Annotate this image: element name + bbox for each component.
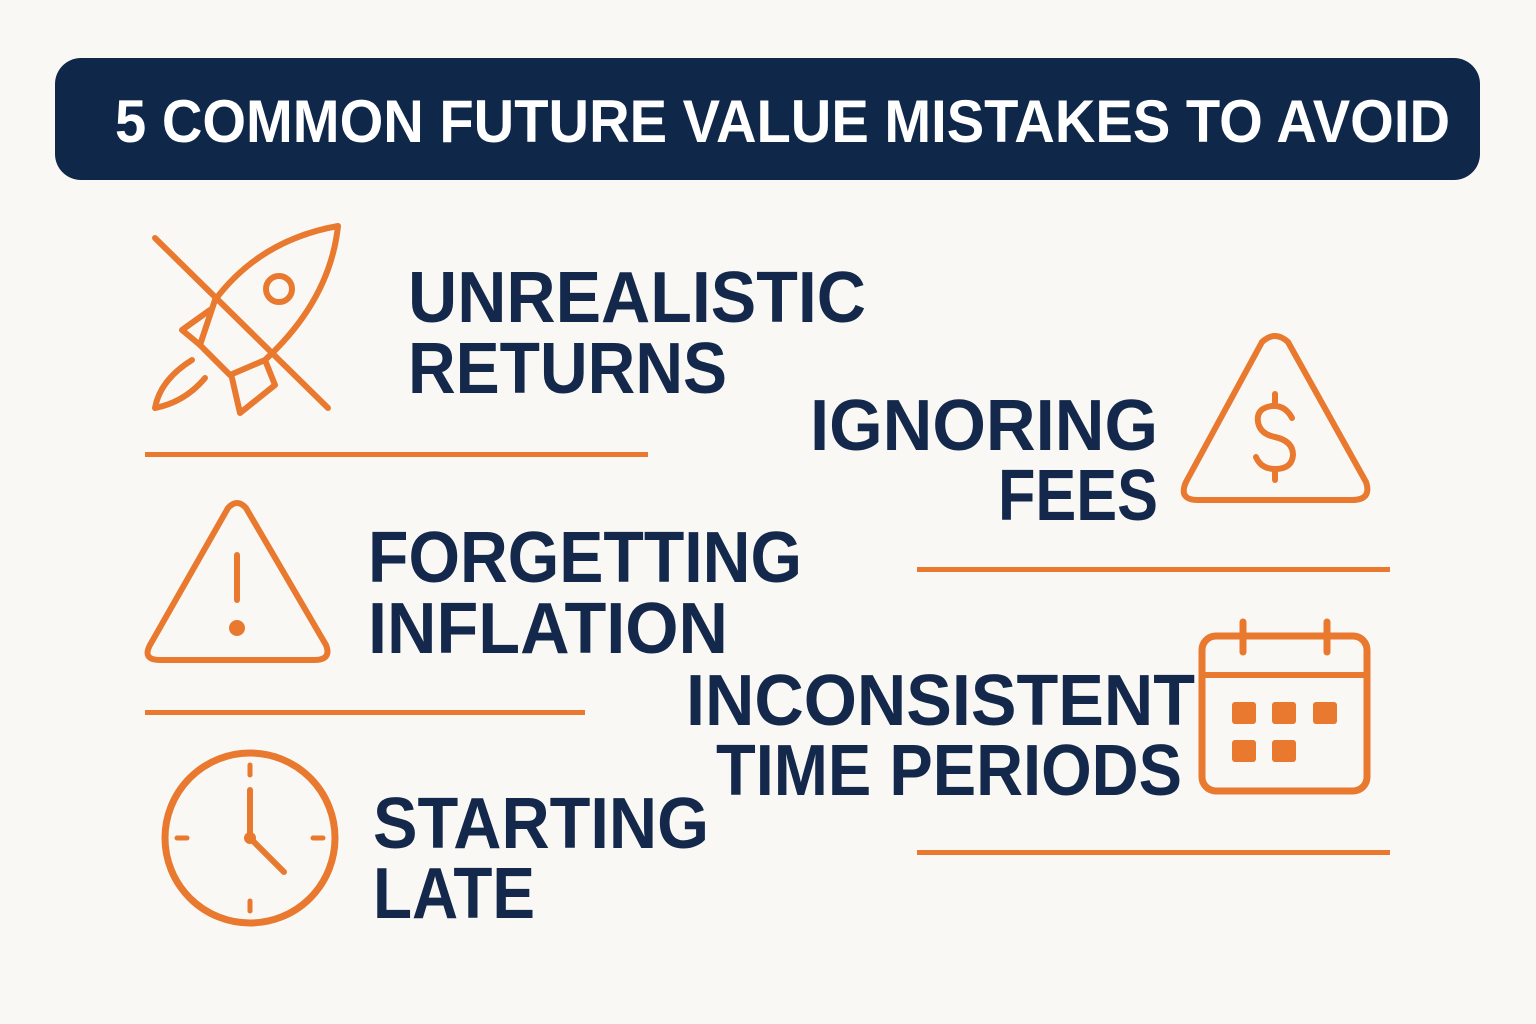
divider: under unrealistic returns — [145, 452, 648, 457]
title banner — [55, 58, 1480, 180]
divider: under ignoring fees — [917, 567, 1390, 572]
heading: ignoring fees: IGNORING — [810, 386, 1158, 466]
heading: unrealistic returns: UNREALISTIC — [408, 258, 866, 338]
icon: crossed-out rocket — [155, 226, 338, 413]
heading: starting late: LATE — [373, 854, 535, 934]
heading: inconsistent time periods: INCONSISTENT — [686, 661, 1195, 741]
heading: ignoring fees — [810, 386, 1158, 536]
heading: forgetting inflation: INFLATION — [368, 589, 728, 669]
heading: starting late — [373, 784, 709, 934]
title banner: 5 COMMON FUTURE VALUE MISTAKES TO AVOID — [115, 88, 1450, 155]
icon: warning exclamation — [148, 503, 328, 660]
heading: inconsistent time periods: TIME PERIODS — [716, 731, 1182, 811]
divider: under forgetting inflation — [145, 710, 585, 715]
heading: forgetting inflation: FORGETTING — [368, 518, 802, 598]
heading: forgetting inflation — [368, 518, 802, 669]
heading: inconsistent time periods — [686, 661, 1195, 811]
divider: under inconsistent time periods — [917, 850, 1390, 855]
icon: clock — [165, 753, 335, 923]
heading: starting late: STARTING — [373, 784, 709, 864]
heading: unrealistic returns: RETURNS — [408, 329, 727, 409]
heading: unrealistic returns — [408, 258, 866, 409]
heading: ignoring fees: FEES — [998, 456, 1158, 536]
icon: calendar — [1202, 622, 1367, 791]
icon: warning with dollar — [1184, 336, 1367, 500]
